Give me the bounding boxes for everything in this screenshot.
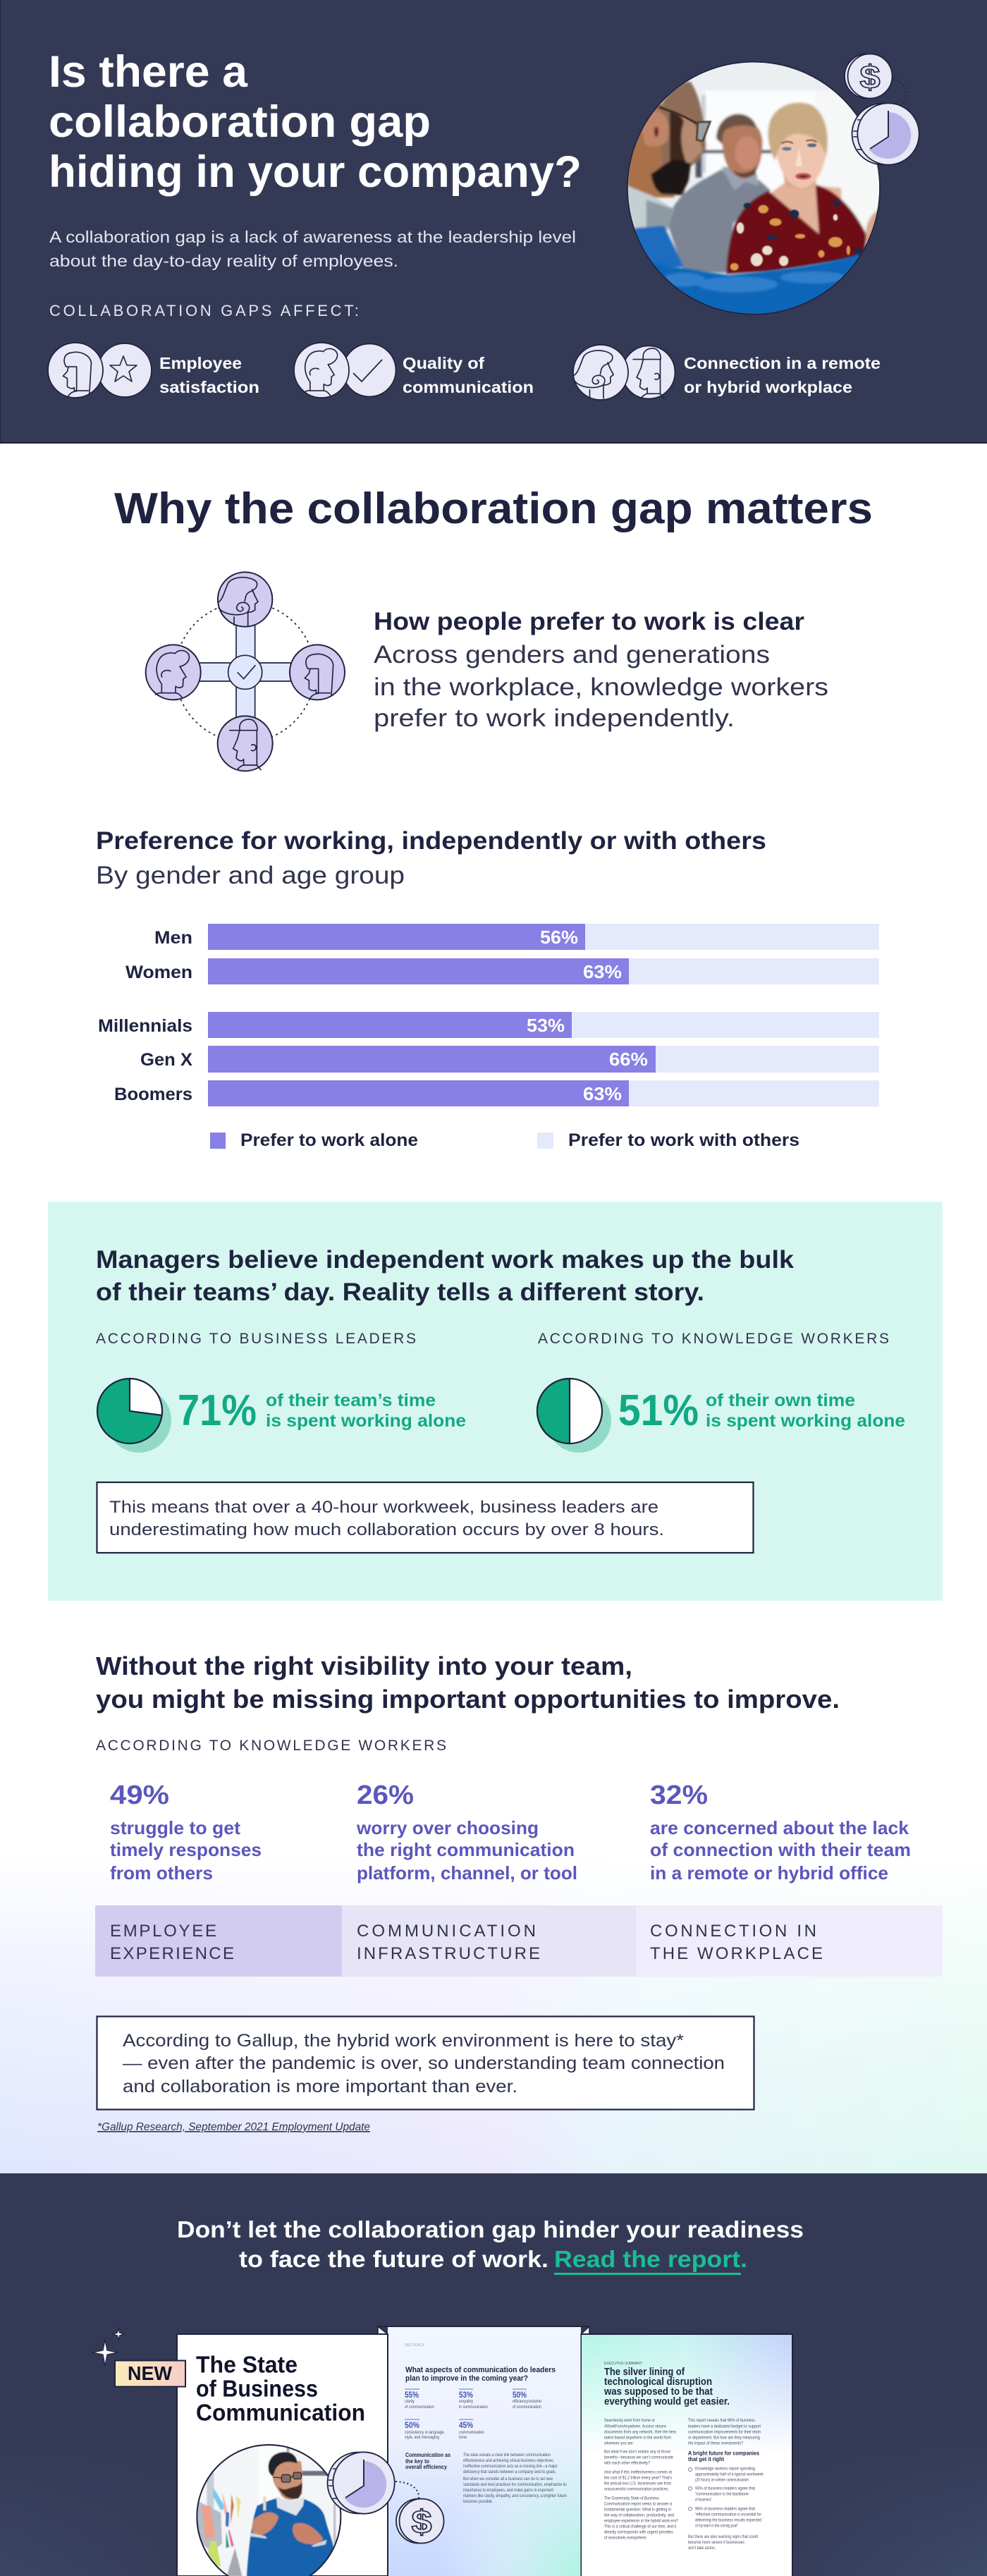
report page: middle (378, 2326, 589, 2576)
report page: right: fundamental question: What is getting in (604, 2508, 671, 2513)
cover title: Communication (196, 2399, 365, 2426)
section background gradient (0, 1622, 987, 2174)
row: Women (125, 958, 879, 984)
report page: right: the way of collaboration, productivity, and (604, 2513, 674, 2518)
section title: Why the collaboration gap matters (114, 484, 873, 533)
row: Men: Men (154, 928, 192, 948)
report page: middle: clarity (405, 2399, 415, 2404)
report page: middle: tone (459, 2435, 467, 2440)
report page: middle: 45% (459, 2420, 473, 2430)
row: Boomers (114, 1080, 879, 1106)
woman (771, 183, 841, 235)
report page: middle: efficiency/volume (513, 2399, 541, 2404)
footnote: *Gallup Research, September 2021 Employment Update (97, 2121, 370, 2133)
row: Gen X: 66% (609, 1049, 648, 1070)
report page: middle: SECTION 3 (405, 2343, 424, 2348)
callout: Gallup hybrid work: According to Gallup, the hybrid work environment is here to stay* (123, 2031, 684, 2051)
item: quality of communication: Quality of (403, 354, 484, 372)
report page: right: employee experience in the hybrid work era? (604, 2519, 678, 2524)
stat: knowledge workers 51% (537, 1331, 905, 1453)
item: connection in a remote or hybrid workplace (573, 345, 881, 400)
report page: right: talent based anywhere in the world from (604, 2436, 671, 2441)
main title: collaboration gap (49, 97, 431, 147)
report page: right: everything would get easier. (604, 2396, 730, 2407)
report page: middle: The data reveals a clear link between communication (463, 2453, 551, 2458)
report page: middle: standards and best practices for communication, emphasize its (463, 2482, 567, 2487)
cover title: of Business (196, 2375, 318, 2402)
row: Millennials: 53% (527, 1015, 565, 1036)
item: employee satisfaction: satisfaction (159, 378, 259, 396)
connector: dotted arc (893, 78, 907, 104)
label: according to knowledge workers: ACCORDING TO KNOWLEDGE WORKERS (96, 1738, 446, 1754)
legend: Prefer to work alone (240, 1130, 418, 1150)
intro text (49, 228, 576, 270)
row: Gen X (140, 1046, 879, 1073)
stat: knowledge workers 51%: of their own time (706, 1391, 855, 1410)
chart heading (96, 827, 766, 889)
report page: middle: consistency in language, (405, 2430, 445, 2435)
item: employee satisfaction: Employee (159, 354, 242, 372)
legend (210, 1130, 799, 1150)
main title: Is there a (49, 47, 248, 97)
item: connection in a remote or hybrid workplace: Connection in a remote (684, 354, 881, 372)
icon: clock coin (327, 2452, 395, 2514)
header panel (0, 0, 987, 444)
section heading: visibility: you might be missing important opportunities to improve. (96, 1685, 840, 1714)
column: employee experience: 49% (110, 1781, 169, 1810)
column: employee experience (95, 1781, 342, 1977)
chart heading: By gender and age group (96, 862, 405, 889)
report page: middle: effectiveness and achieving critical business objectives. (463, 2458, 554, 2463)
row: Men: 56% (540, 927, 578, 948)
report page: right: directly corresponds with urgent priorities (604, 2530, 673, 2535)
report page: middle: But when we consider all a business can do to set new (463, 2477, 553, 2482)
intro text: A collaboration gap is a lack of awareness at the leadership level (49, 228, 576, 246)
report page: middle: of communication (513, 2405, 541, 2410)
row: Boomers: 63% (583, 1083, 622, 1104)
stat: business leaders 71%: 71% (178, 1386, 257, 1435)
column: connection in the workplace: 32% (650, 1781, 708, 1810)
heading (96, 1246, 795, 1306)
report page: right: 96% of business leaders agree that (695, 2507, 755, 2512)
intro text: about the day-to-day reality of employees. (49, 252, 398, 270)
report page: right (582, 2333, 793, 2576)
call to action: Don’t let the collaboration gap hinder your readiness (177, 2216, 804, 2242)
column: employee experience: timely responses (110, 1839, 262, 1860)
text block: how people prefer to work: prefer to work independently. (374, 704, 735, 732)
report page: right: or department. But how are they measuring (688, 2436, 760, 2441)
photo: three colleagues in a circle (625, 59, 883, 317)
column: communication infrastructure: COMMUNICATION (357, 1922, 536, 1941)
report page: right: communication improvements for their team (688, 2430, 761, 2435)
column: connection in the workplace (636, 1781, 943, 1977)
chart heading: Preference for working, independently or with others (96, 827, 766, 855)
column: communication infrastructure (342, 1781, 636, 1977)
report page: right: “communication is the backbone (695, 2492, 749, 2497)
callout: 40-hour workweek (97, 1482, 753, 1553)
report page: middle: Ineffective communication acts as a missing link—a major (463, 2464, 558, 2469)
report page: right: The Grammarly State of Business (604, 2496, 659, 2501)
cover photo: man in blue sweater (195, 2442, 345, 2576)
report page: middle: in communication (459, 2405, 488, 2410)
report page: middle: overall efficiency (405, 2463, 447, 2470)
report page: right: with each other effectively? (603, 2461, 650, 2466)
report page: right: benefits—because we can’t communicate (604, 2455, 673, 2460)
cover title: The State (196, 2351, 298, 2378)
report page: cover (177, 2334, 388, 2576)
report page: right: the cost of $1.2 trillion every year? That’s (604, 2476, 672, 2481)
call to action (177, 2216, 804, 2275)
report page: middle: What aspects of communication do leaders (405, 2366, 556, 2374)
report page: right: The silver lining of (604, 2367, 685, 2378)
report page: right: (20 hours) on written communication (695, 2478, 749, 2483)
panel: managers vs reality (48, 1202, 943, 1601)
report page: right: of executives everywhere. (604, 2536, 647, 2541)
text block: how people prefer to work: in the workplace, knowledge workers (374, 673, 828, 701)
text block: how people prefer to work (374, 608, 828, 732)
column: communication infrastructure: worry over choosing (356, 1817, 539, 1838)
report page: middle: Communication as (405, 2451, 450, 2458)
report page: middle: plan to improve in the coming year? (405, 2374, 528, 2383)
text block: how people prefer to work: How people prefer to work is clear (374, 608, 804, 635)
row: Men (154, 924, 879, 950)
grey shirt (668, 169, 771, 273)
column: connection in the workplace: in a remote or hybrid office (650, 1862, 888, 1884)
stat: knowledge workers 51%: ACCORDING TO KNOWLEDGE WORKERS (538, 1331, 889, 1347)
report page: right: EXECUTIVE SUMMARY (604, 2362, 642, 2366)
report page: right: But what if we don’t realize any of those (604, 2450, 670, 2455)
report page: right: 93% of business leaders agree that (695, 2486, 755, 2491)
column: employee experience: struggle to get (110, 1817, 240, 1838)
report page: middle: becomes possible. (463, 2499, 493, 2504)
main title (49, 47, 582, 197)
item: connection in a remote or hybrid workplace: or hybrid workplace (684, 378, 852, 396)
report page: right: unsuccessful communication practices. (604, 2487, 669, 2492)
row: Women: 63% (583, 961, 622, 982)
report page: right: of business” (695, 2498, 712, 2503)
callout: Gallup hybrid work: and collaboration is more important than ever. (123, 2077, 517, 2096)
row: Millennials: Millennials (98, 1016, 192, 1036)
stat: business leaders 71%: ACCORDING TO BUSINESS LEADERS (96, 1331, 416, 1347)
column: connection in the workplace: CONNECTION IN (650, 1922, 816, 1941)
report page: right: A bright future for companies (688, 2450, 759, 2457)
report page: right: delivering the business results expected (695, 2518, 761, 2523)
call to action: to face the future of work. (239, 2246, 548, 2272)
heading: Managers believe independent work makes up the bulk (96, 1246, 795, 1274)
column: connection in the workplace: THE WORKPLACE (650, 1944, 823, 1963)
report page: right: But there are also warning signs that could (688, 2534, 758, 2539)
item: quality of communication: communication (403, 378, 534, 396)
report page: right: technological disruption (604, 2376, 712, 2388)
report page: right: the impact of these investments? (688, 2441, 743, 2446)
icon: dollar coin (845, 54, 893, 99)
callout: Gallup hybrid work: — even after the pandemic is over, so understanding team connection (123, 2053, 725, 2073)
subheading: COLLABORATION GAPS AFFECT: (49, 302, 359, 319)
report page: middle: the key to (405, 2458, 429, 2465)
report page: right: Seamlessly work from home or (604, 2418, 656, 2423)
stat: business leaders 71% (96, 1331, 466, 1453)
report page: right: Knowledge workers report spending (695, 2467, 755, 2472)
bar chart: preference by gender and age (98, 924, 879, 1106)
stat: business leaders 71%: is spent working alone (266, 1411, 466, 1431)
report page: right: Communication report seeks to answer a (604, 2502, 672, 2507)
callout: 40-hour workweek: underestimating how much collaboration occurs by over 8 hours. (109, 1520, 664, 1539)
row: Gen X: Gen X (140, 1050, 192, 1070)
report page: middle: style, and messaging (405, 2435, 439, 2440)
report page: middle: of communication (405, 2405, 434, 2410)
report page: middle: 50% (405, 2420, 419, 2430)
report page: right: documents from any network. Hire the best (604, 2430, 676, 2435)
report page: right: was supposed to be that (603, 2386, 713, 2398)
report page: right: become more severe if businesses (688, 2540, 744, 2545)
badge: NEW (115, 2361, 185, 2386)
report page: right: leaders have a dedicated budget to support (688, 2424, 761, 2429)
column: communication infrastructure: 26% (357, 1781, 414, 1810)
footer panel (0, 2173, 987, 2576)
row: Boomers: Boomers (114, 1085, 192, 1104)
callout: Gallup hybrid work (97, 2017, 754, 2110)
report page: middle: empathy (459, 2399, 474, 2404)
report page: right: wherever you are. (603, 2441, 634, 2446)
heading: of their teams’ day. Reality tells a different story. (96, 1278, 704, 1306)
item: employee satisfaction (48, 343, 259, 398)
legend: Prefer to work with others (568, 1130, 799, 1150)
stat: business leaders 71%: of their team’s time (266, 1391, 436, 1410)
call to action: Read the report. (554, 2246, 747, 2272)
section heading: visibility (96, 1652, 840, 1714)
report page: middle: importance to employees, and make gains in important (463, 2488, 553, 2493)
main title: hiding in your company? (49, 147, 582, 197)
report page: middle: markers like clarity, empathy, and consistency, a brighter future (463, 2493, 567, 2498)
row: Millennials (98, 1012, 879, 1038)
report page: right: that get it right (688, 2455, 724, 2462)
column: employee experience: EMPLOYEE (110, 1922, 216, 1941)
column: employee experience: from others (110, 1862, 213, 1884)
section heading: visibility: Without the right visibility into your team, (96, 1652, 632, 1680)
report page: middle: communication (459, 2430, 484, 2435)
left man (627, 104, 675, 197)
row: Women: Women (125, 963, 192, 982)
connector: dotted arc (396, 2482, 419, 2498)
item: quality of communication (294, 343, 534, 398)
column: connection in the workplace: of connection with their team (650, 1839, 911, 1860)
report page: right: don’t take action. (688, 2546, 716, 2551)
report page: right: of my team in the coming year” (695, 2524, 738, 2529)
column: communication infrastructure: the right communication (357, 1839, 575, 1860)
report page: right: #WorkFromAnywhere. Access secure (604, 2424, 666, 2429)
column: communication infrastructure: platform, channel, or tool (357, 1862, 577, 1884)
report page: right: the annual loss U.S. businesses see from (604, 2481, 671, 2486)
report page: middle: 55% (405, 2390, 419, 2400)
report page: right: “effective communication is essential for (695, 2513, 762, 2517)
cover title (196, 2351, 365, 2426)
report page: right: This is a critical challenge of our time, and it (604, 2525, 676, 2529)
report page: middle: 53% (459, 2390, 473, 2400)
report page: right: And what if this ineffectiveness comes at (604, 2470, 672, 2475)
column: communication infrastructure: INFRASTRUCTURE (357, 1944, 540, 1963)
stat: knowledge workers 51%: 51% (618, 1386, 699, 1435)
callout: 40-hour workweek: This means that over a 40-hour workweek, business leaders are (109, 1498, 658, 1517)
badge: NEW: NEW (128, 2362, 173, 2384)
text block: how people prefer to work: Across genders and generations (374, 641, 770, 669)
icon: sparkles (92, 2328, 124, 2366)
report page: right: This report reveals that 96% of business (688, 2418, 755, 2423)
icon: dollar coin (396, 2499, 444, 2543)
column: employee experience: EXPERIENCE (110, 1944, 234, 1963)
stat: knowledge workers 51%: is spent working alone (706, 1411, 905, 1431)
report page: middle: 50% (513, 2390, 527, 2400)
report page: middle: deficiency that stands between a company and its goals. (463, 2470, 556, 2474)
column: connection in the workplace: are concerned about the lack (650, 1817, 909, 1838)
report page: right: approximately half of a typical workweek (695, 2472, 764, 2477)
icon: clock coin (852, 103, 919, 165)
icon: four people connected around a check (146, 572, 345, 771)
